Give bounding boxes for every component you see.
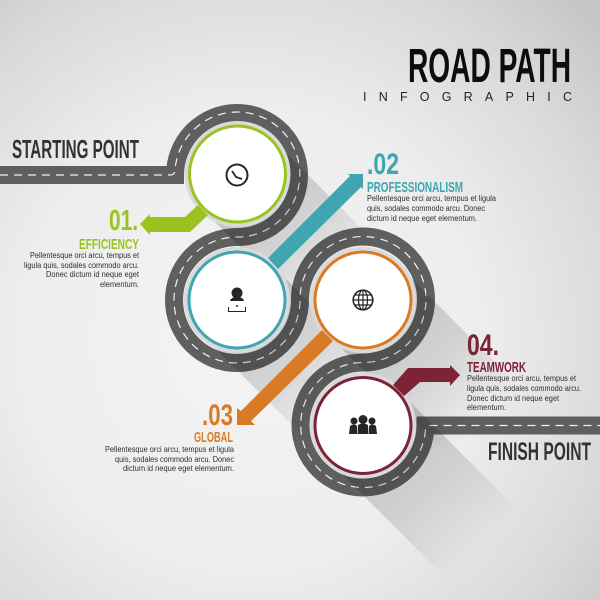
text block 04: elementum. xyxy=(467,403,506,412)
subtitle: INFOGRAPHIC xyxy=(363,90,572,104)
text block 03: dictum id neque eget elementum. xyxy=(123,464,234,473)
text block 01: Pellentesque orci arcu, tempus et xyxy=(30,251,140,260)
text block 03: Pellentesque orci arcu, tempus et ligula xyxy=(105,445,235,454)
text block 03: .03 xyxy=(202,399,233,432)
arrow: orange global xyxy=(237,330,333,425)
long shadows xyxy=(202,139,518,580)
text block 02: Pellentesque orci arcu, tempus et ligula xyxy=(367,194,497,203)
disc 2: person xyxy=(189,252,285,348)
disc 1: clock xyxy=(190,126,286,222)
arrow: teal professionalism xyxy=(268,174,363,269)
title xyxy=(363,40,572,104)
text block 01 xyxy=(24,205,140,289)
text block 02: PROFESSIONALISM xyxy=(367,179,463,196)
icon: clock xyxy=(226,164,248,186)
disc 3: globe xyxy=(315,252,411,348)
text block 01: Donec dictum id neque eget xyxy=(46,270,140,279)
icon: team xyxy=(349,415,377,434)
text block 03: quis, sodales commodo arcu. Donec xyxy=(115,455,234,464)
arrow: green efficiency xyxy=(140,205,208,235)
text block 02: dictum id neque eget elementum. xyxy=(367,214,477,223)
text block 01: ligula quis, sodales commodo arcu. xyxy=(24,261,139,270)
disc 4: team xyxy=(315,378,411,474)
text block 04: TEAMWORK xyxy=(467,359,526,376)
text block 02: .02 xyxy=(367,148,399,181)
text block 04: 04. xyxy=(467,329,499,362)
road path xyxy=(0,112,600,488)
text block 02: quis, sodales commodo arcu. Donec xyxy=(367,204,485,213)
text block 03: GLOBAL xyxy=(194,430,233,446)
text block 04: ligula quis, sodales commodo arcu. xyxy=(467,384,581,393)
text block 01: EFFICIENCY xyxy=(79,236,139,253)
text block 01: elementum. xyxy=(100,280,139,289)
label: starting point: STARTING POINT xyxy=(12,134,139,164)
icon: person at laptop xyxy=(228,288,246,312)
text block 01: 01. xyxy=(109,205,138,237)
text block 04: Pellentesque orci arcu, tempus et xyxy=(467,374,577,383)
text block 02 xyxy=(367,148,497,223)
inner rings under discs xyxy=(184,121,416,478)
arrow: maroon teamwork xyxy=(393,365,460,396)
text block 04: Donec dictum id neque eget xyxy=(467,394,560,403)
text block 03 xyxy=(105,399,235,473)
text block 04 xyxy=(467,329,581,412)
icon: globe xyxy=(353,290,373,310)
